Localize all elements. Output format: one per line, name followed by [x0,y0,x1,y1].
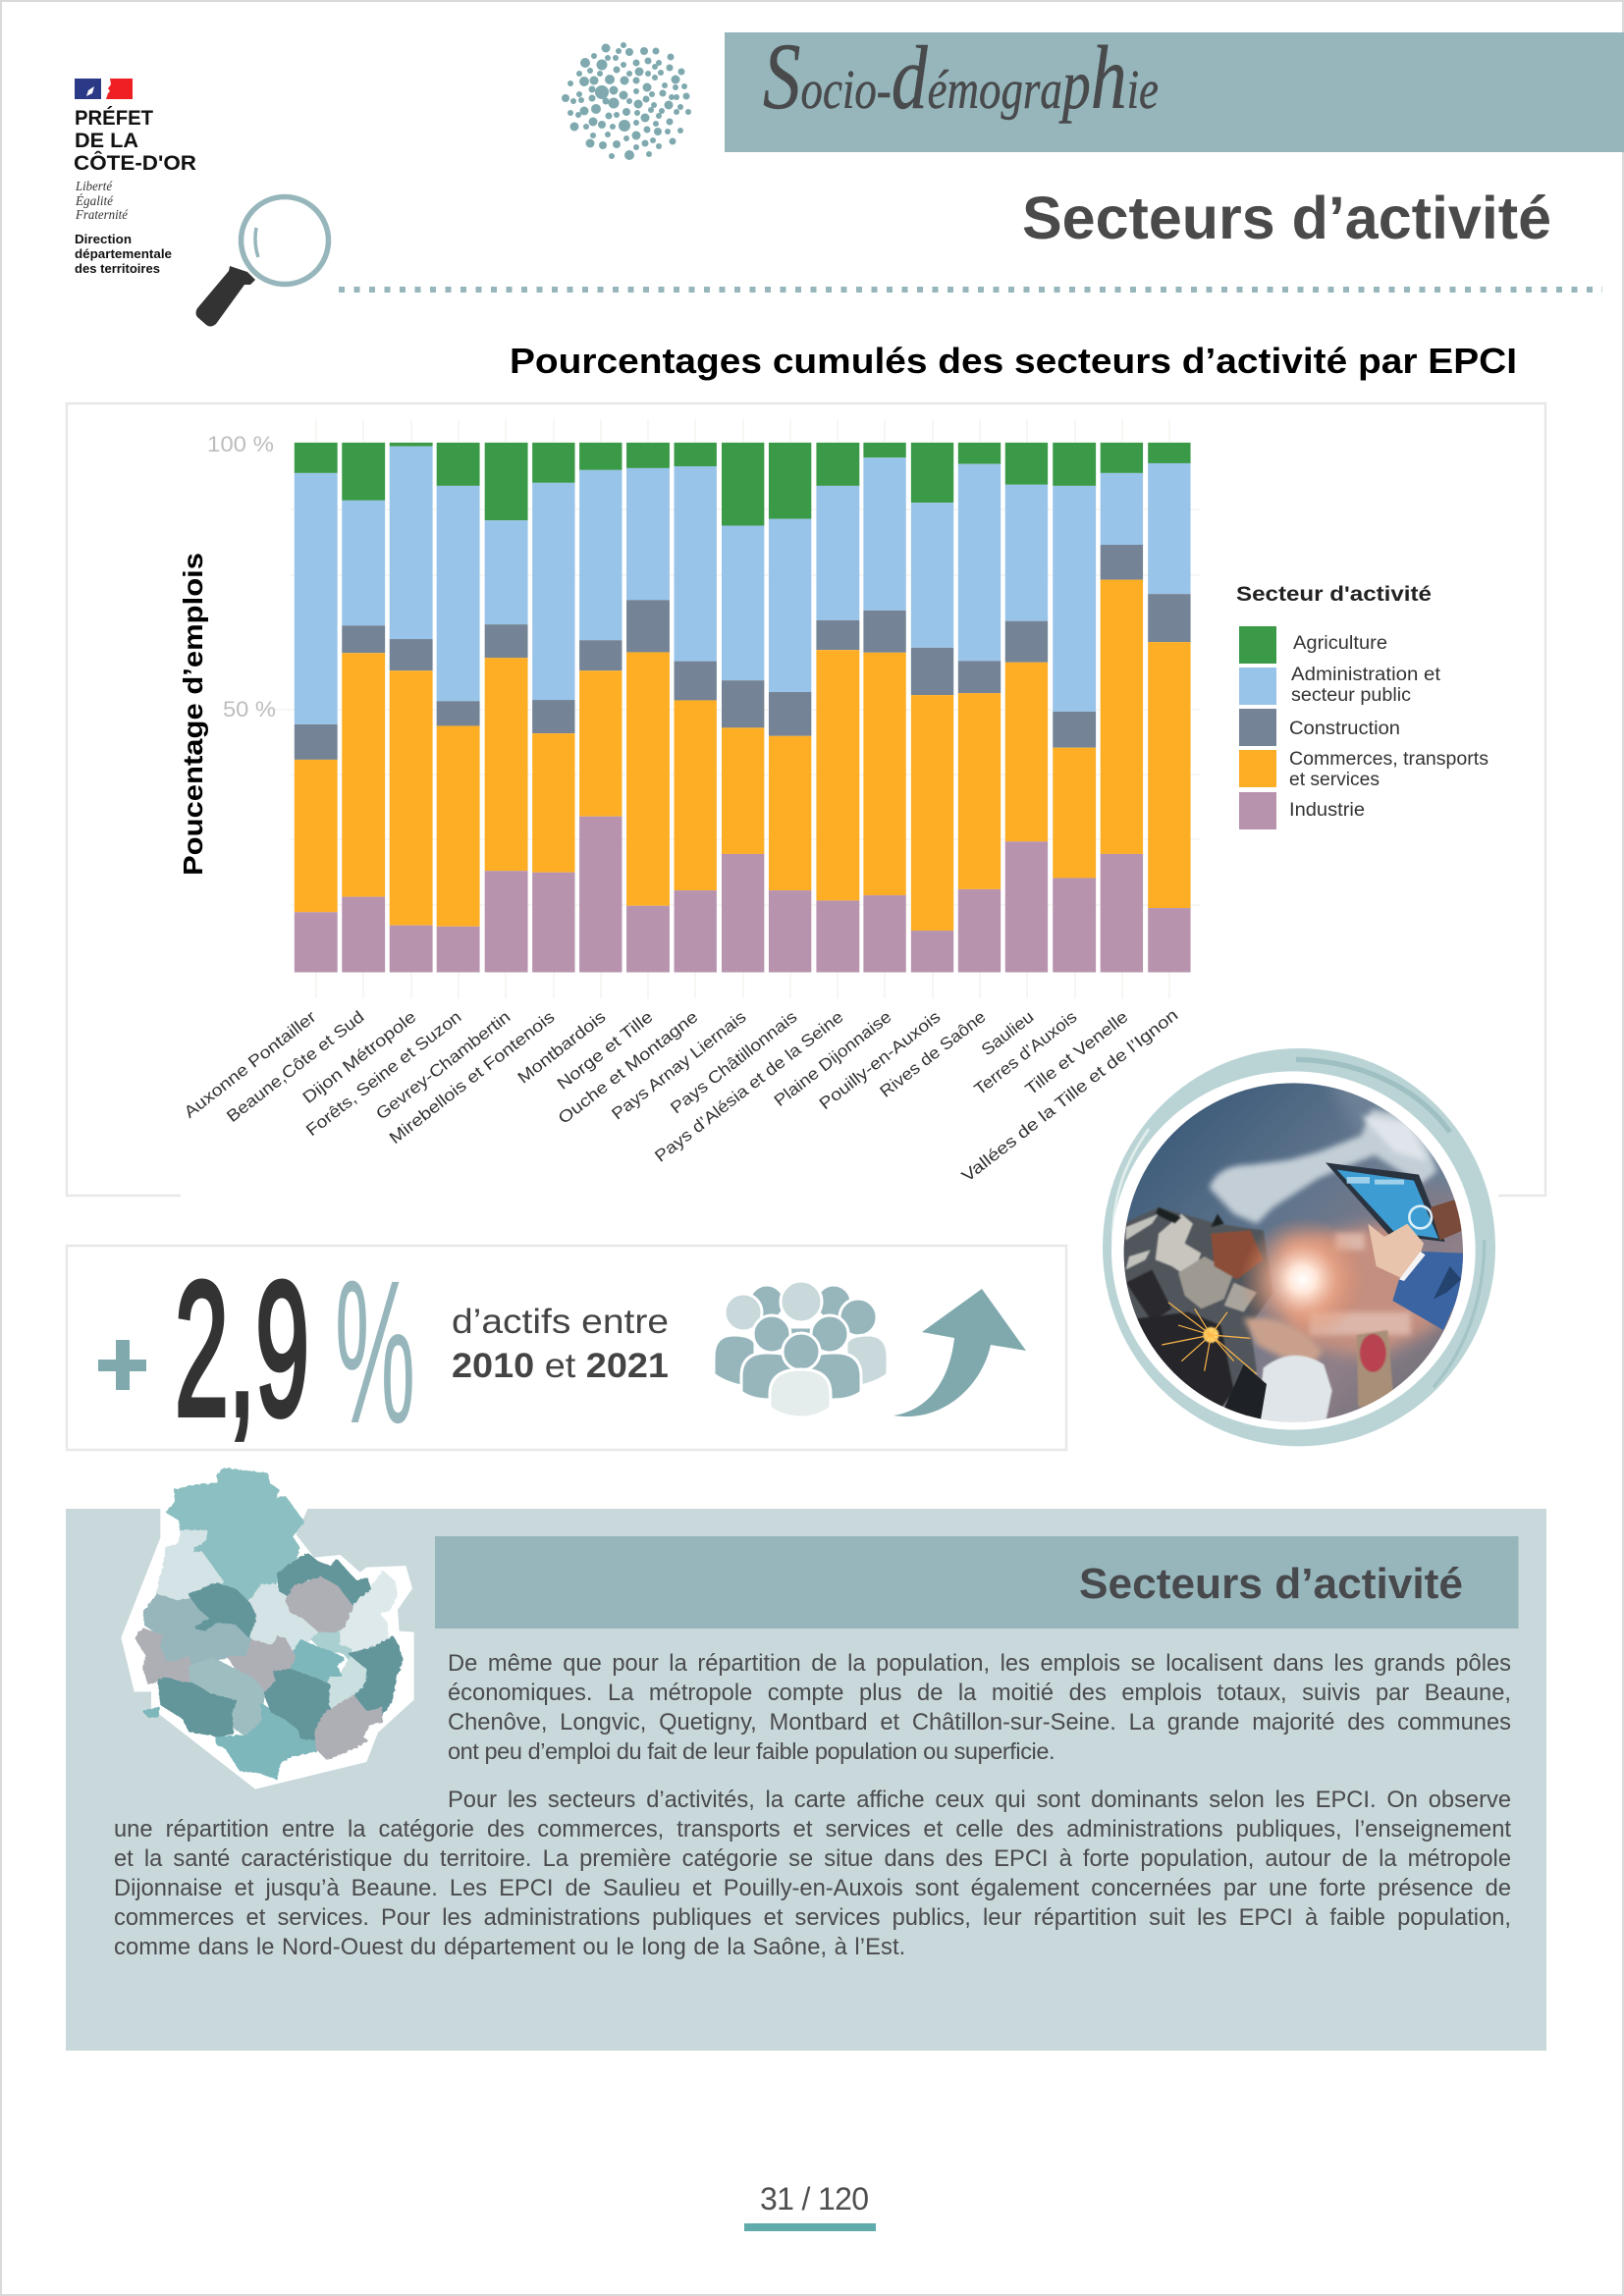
KPI caption: d’actifs entre [452,1303,669,1341]
logo text: préfet: CÔTE-D'OR [74,151,196,175]
paragraph 1 [448,1651,1511,1764]
legend: administration [1239,665,1441,706]
bar: Saulieu [1005,443,1048,973]
legend: commerces: Commerces, transports [1289,749,1489,770]
bar: Auxonne Pontailler [295,443,338,973]
logo direction: départementale [75,247,172,261]
body text: une répartition entre la catégorie des commerces, transports et services et celle des administrations publiques, l’enseignement [114,1817,1511,1842]
legend: industrie: Industrie [1289,800,1365,821]
legend: commerces: et services [1289,770,1380,790]
page title: Secteurs d’activité [1022,185,1551,251]
bar: Forêts, Seine et Suzon [437,443,480,973]
body text: économiques. La métropole compte plus de la moitié des emplois totaux, suivis par Beaune, [448,1681,1511,1706]
icon: magnifying glass [196,196,328,326]
logo text: préfet: PRÉFET [75,107,153,130]
panel: KPI actifs [67,1239,1066,1467]
logo motto: Liberté [75,179,113,193]
section header bar [435,1536,1518,1629]
bar: Beaune, Côte et Sud [342,443,385,973]
header banner: Socio-démographie [725,24,1624,152]
legend [1236,583,1489,829]
bar: Tille et Venelle [1101,443,1143,973]
y axis tick labels: 50 % [223,697,276,721]
KPI caption [452,1303,669,1385]
section heading: Secteurs d’activité [1079,1560,1463,1608]
y axis title: Poucentage d’emplois [178,553,208,876]
x axis labels: Montbardois [514,1007,609,1088]
icon: group of people [714,1281,888,1417]
x axis labels: Forêts, Seine et Suzon [302,1007,464,1140]
legend: administration: secteur public [1291,685,1411,706]
stacked bars [295,443,1191,973]
legend: construction: Construction [1289,719,1400,739]
x axis labels: Plaine Dijonnaise [771,1007,894,1110]
bar: Gevrey-Chambertin [485,443,528,973]
logo motto: Égalité [75,193,114,208]
arrow up [893,1289,1026,1416]
x axis labels: Pays Arnay Liernais [608,1007,749,1124]
panel: KPI actifs: % [335,1239,415,1467]
bar: Pays d'Alésia et de la Seine [816,443,859,973]
photo: connected industry [1103,1048,1495,1446]
page number: 31 / 120 [760,2181,869,2216]
x axis labels: Vallées de la Tille et de l’Ignon [958,1005,1181,1186]
bar: Pouilly-en-Auxois [911,443,953,973]
body text: De même que pour la répartition de la population, les emplois se localisent dans les grands pôles [448,1651,1511,1677]
x axis labels: Dijon Métropole [299,1007,419,1107]
body text: ont peu d’emploi du fait de leur faible population ou superficie. [448,1738,1055,1764]
brush ring [1103,1048,1495,1446]
y axis tick labels: 100 % [207,432,274,456]
map regions [135,1469,402,1779]
map white halo [121,1453,414,1789]
bar: Dijon Métropole [390,443,433,973]
bar: Ouche et Montagne [675,443,717,973]
x axis labels: Norge et Tille [554,1007,656,1094]
KPI caption: 2010 et 2021 [452,1347,669,1385]
logo direction [75,233,172,276]
legend: administration: Administration et [1291,665,1441,685]
legend: industrie [1239,792,1365,829]
x axis labels: Rives de Saône [877,1007,989,1101]
logo direction: Direction [75,233,132,246]
legend: agriculture: Agriculture [1293,633,1387,654]
x axis labels: Ouche et Montagne [555,1007,701,1128]
legend: construction [1239,709,1400,746]
panel: stacked bar chart [67,403,1545,1196]
logo motto: Fraternité [75,207,129,222]
x axis labels: Pouilly-en-Auxois [816,1007,944,1113]
legend: agriculture [1239,626,1387,664]
y axis tick labels [207,432,276,721]
bar: Rives de Saône [958,443,1001,973]
body text: Pour les secteurs d’activités, la carte affiche ceux qui sont dominants selon les EPCI. On observe [448,1788,1511,1813]
x axis labels: Saulieu [978,1007,1037,1059]
map of EPCI [121,1453,414,1789]
x axis labels: Beaune,Côte et Sud [223,1007,367,1126]
legend: commerces [1239,749,1489,790]
x axis labels: Pays Châtillonnais [667,1007,800,1117]
bar: Mirebellois et Fontenois [532,443,575,973]
logo text: préfet [74,107,196,175]
legend title: Secteur d'activité [1236,583,1432,606]
logo text: préfet: DE LA [75,130,138,152]
x axis labels: Pays d’Alésia et de la Seine [651,1007,846,1166]
value 2,9: 2,9 [175,1243,309,1456]
panel: secteurs d'activité text [66,1453,1546,2051]
bar: Vallées de la Tille et de l'Ignon [1148,443,1191,973]
paragraph 2 [114,1788,1511,1960]
x axis labels: Gevrey-Chambertin [372,1007,514,1124]
logo direction: des territoires [75,262,160,276]
body text: Dijonnaise et jusqu’à Beaune. Les EPCI de Saulieu et Pouilly-en-Auxois sont également concernées par une forte présence de [114,1876,1511,1901]
body text: et la santé caractéristique du territoire. La première catégorie se situe dans des EPCI à forte population, autour de la métropole [114,1846,1511,1872]
plus sign [98,1340,146,1390]
body text: Chenôve, Longvic, Quetigny, Montbard et Châtillon-sur-Seine. La grande majorité des communes [448,1710,1511,1735]
bar: Terres d'Auxois [1053,443,1096,973]
bar: Pays Châtillonnais [769,443,811,973]
bar: Norge et Tille [626,443,670,973]
logo motto [75,179,129,222]
page number [744,2181,876,2231]
x axis labels: Auxonne Pontailler [181,1007,320,1122]
x axis labels: Tille et Venelle [1022,1007,1131,1098]
x axis labels: Mirebellois et Fontenois [386,1007,558,1148]
chart heading: Pourcentages cumulés des secteurs d’activité par EPCI [510,341,1517,381]
x axis labels: Terres d’Auxois [971,1007,1080,1098]
banner script text: Socio-démographie [763,24,1159,129]
bar: Pays Arnay Liernais [722,443,764,973]
body text: comme dans le Nord-Ouest du département ou le long de la Saône, à l’Est. [114,1935,905,1960]
bar: Montbardois [579,443,622,973]
icon: Marianne flag [75,79,133,99]
x axis labels [181,1005,1181,1186]
photo content [1112,1077,1473,1430]
logo: préfet de la Côte-d'Or [74,79,196,276]
body text: commerces et services. Pour les administrations publiques et services publics, leur répartition suit les EPCI à faible population, [114,1905,1511,1931]
icon: dot cluster [562,42,691,160]
bar: Plaine Dijonnaise [863,443,906,973]
